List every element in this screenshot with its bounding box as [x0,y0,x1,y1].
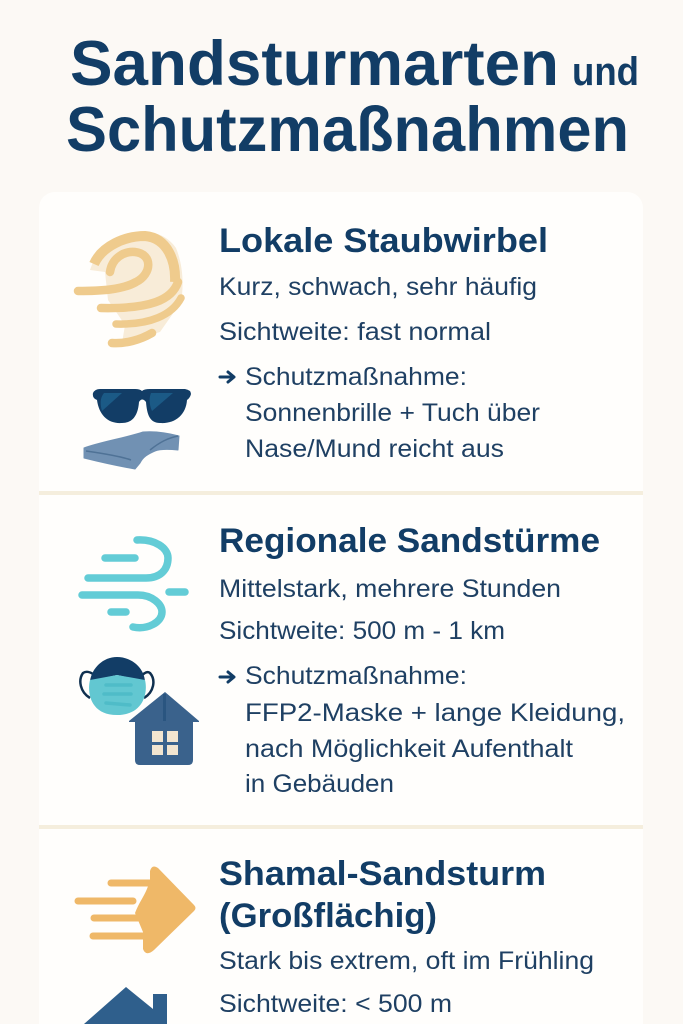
text: protection [245,363,540,463]
title: Schutzmaßnahmen [66,95,629,165]
heading: (Großflächig) [219,897,437,935]
text: protection: nach Möglichkeit Aufenthalt [245,735,573,763]
arrow [220,372,234,382]
text: protection [245,662,625,798]
icon: house [129,692,199,765]
text: description: Kurz, schwach, sehr häufig [219,273,537,301]
panel: Lokale Staubwirbel [78,222,548,469]
icon: fast arrow [78,867,196,953]
heading: Shamal-Sandsturm [219,855,546,893]
icon: sunglasses [93,389,191,423]
icon: mask [80,657,153,715]
heading [219,855,546,935]
title [66,29,639,165]
text: description: Mittelstark, mehrere Stunden [219,575,561,603]
title: Sandsturmarten [70,29,559,99]
text: visibility: Sichtweite: 500 m - 1 km [219,617,505,645]
heading: Lokale Staubwirbel [219,222,548,260]
icon: cloth [84,432,179,469]
text: visibility: Sichtweite: < 500 m [219,990,452,1018]
title: und [572,50,639,94]
heading: Regionale Sandstürme [219,522,600,560]
text: protection: Schutzmaßnahme: [245,363,467,391]
panel: card background [39,192,643,1024]
text: protection: Nase/Mund reicht aus [245,435,504,463]
text: visibility: Sichtweite: fast normal [219,318,491,346]
text: protection: Sonnenbrille + Tuch über [245,399,540,427]
text: protection: Schutzmaßnahme: [245,662,467,690]
panel: Regionale Sandstürme [80,522,625,798]
text: protection: FFP2-Maske + lange Kleidung, [245,699,625,727]
text: description: Stark bis extrem, oft im Frühling [219,947,594,975]
panel: Shamal-Sandsturm [78,855,594,1024]
icon: house roof [84,987,167,1024]
text: protection: in Gebäuden [245,770,394,798]
icon: wind [82,540,185,628]
arrow [220,672,234,682]
icon: dust whirl [78,232,183,343]
